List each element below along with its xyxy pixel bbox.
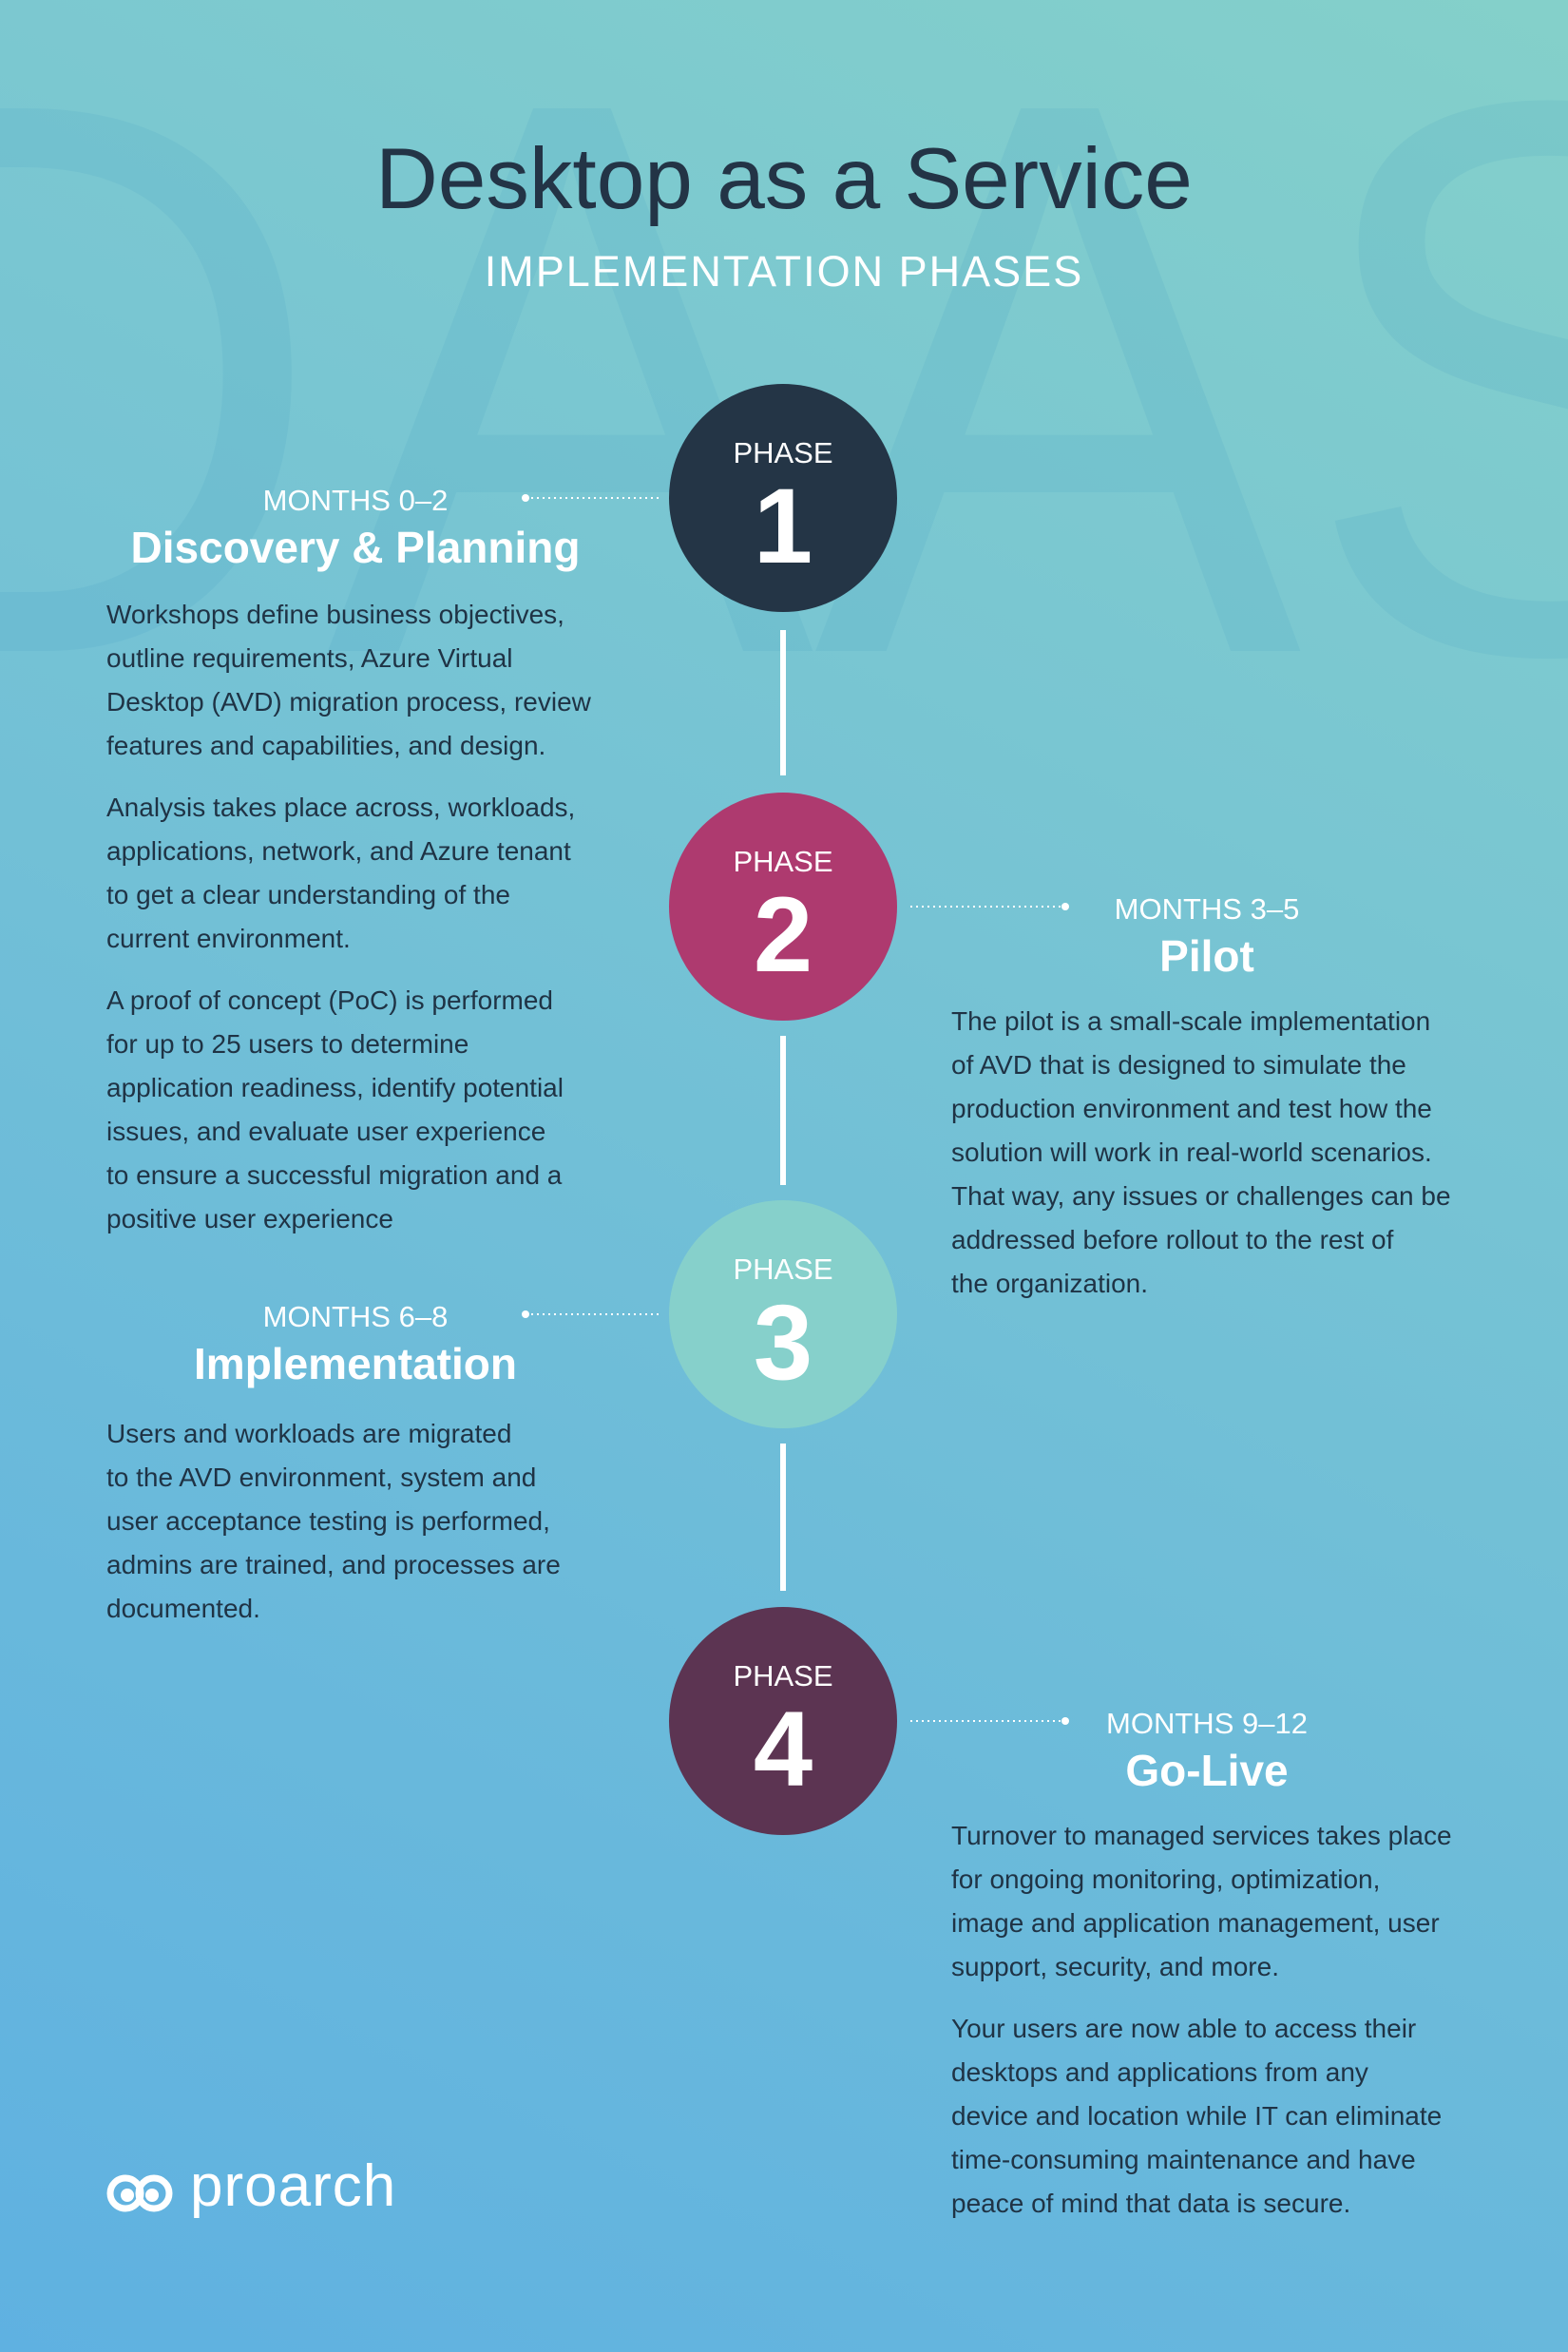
text: features and capabilities, and design. xyxy=(106,731,545,760)
phase 1 circle xyxy=(669,384,897,612)
phase 2 circle: PHASE xyxy=(733,845,833,878)
text: to ensure a successful migration and a xyxy=(106,1160,562,1190)
text: Go-Live xyxy=(1125,1746,1289,1795)
phase 3 text xyxy=(106,1300,561,1623)
text: documented. xyxy=(106,1594,260,1623)
phase 2 circle xyxy=(669,793,897,1021)
text: issues, and evaluate user experience xyxy=(106,1117,545,1146)
phase 2 text xyxy=(951,892,1451,1298)
phase 4 circle: PHASE xyxy=(733,1659,833,1692)
text: Users and workloads are migrated xyxy=(106,1419,511,1448)
text: A proof of concept (PoC) is performed xyxy=(106,985,553,1015)
text: of AVD that is designed to simulate the xyxy=(951,1050,1406,1080)
text: applications, network, and Azure tenant xyxy=(106,836,571,866)
text: Pilot xyxy=(1159,931,1254,981)
text: for up to 25 users to determine xyxy=(106,1029,468,1059)
text: to the AVD environment, system and xyxy=(106,1463,536,1492)
text: Implementation xyxy=(194,1339,517,1388)
text: Desktop (AVD) migration process, review xyxy=(106,687,591,717)
phase 3 circle xyxy=(669,1200,897,1428)
text: device and location while IT can eliminate xyxy=(951,2101,1442,2131)
text: Discovery & Planning xyxy=(131,523,580,572)
text: for ongoing monitoring, optimization, xyxy=(951,1864,1380,1894)
text: MONTHS 9–12 xyxy=(1106,1707,1308,1740)
text: image and application management, user xyxy=(951,1908,1440,1938)
text: MONTHS 0–2 xyxy=(263,484,448,517)
subtitle: IMPLEMENTATION PHASES xyxy=(485,247,1083,296)
text: application readiness, identify potential xyxy=(106,1073,564,1102)
text: The pilot is a small-scale implementation xyxy=(951,1006,1430,1036)
phase 1 circle: 1 xyxy=(754,467,813,585)
text: Analysis takes place across, workloads, xyxy=(106,793,575,822)
phase 2 circle: 2 xyxy=(754,875,813,994)
phase 4 text xyxy=(951,1707,1452,2218)
text: the organization. xyxy=(951,1269,1148,1298)
text: peace of mind that data is secure. xyxy=(951,2189,1350,2218)
text: time-consuming maintenance and have xyxy=(951,2145,1416,2174)
title: Desktop as a Service xyxy=(375,131,1193,227)
text: support, security, and more. xyxy=(951,1952,1279,1981)
text: Turnover to managed services takes place xyxy=(951,1821,1452,1850)
text: current environment. xyxy=(106,924,351,953)
text: addressed before rollout to the rest of xyxy=(951,1225,1393,1254)
text: user acceptance testing is performed, xyxy=(106,1506,550,1536)
text: MONTHS 3–5 xyxy=(1115,892,1299,926)
timeline connector lines xyxy=(780,630,786,1591)
phase 3 circle: 3 xyxy=(754,1283,813,1402)
text: desktops and applications from any xyxy=(951,2057,1368,2087)
text: Your users are now able to access their xyxy=(951,2014,1416,2043)
phase 4 circle xyxy=(669,1607,897,1835)
phase 4 circle: 4 xyxy=(754,1690,813,1808)
phase 1 circle: PHASE xyxy=(733,436,833,469)
text: solution will work in real-world scenarios. xyxy=(951,1138,1432,1167)
text: admins are trained, and processes are xyxy=(106,1550,561,1579)
text: to get a clear understanding of the xyxy=(106,880,510,909)
icon: rings xyxy=(106,2174,173,2212)
text: production environment and test how the xyxy=(951,1094,1432,1123)
phase 1 text xyxy=(106,484,591,1233)
phase 3 circle: PHASE xyxy=(733,1252,833,1286)
logo: proarch: proarch xyxy=(190,2153,396,2219)
text: MONTHS 6–8 xyxy=(263,1300,448,1333)
text: That way, any issues or challenges can be xyxy=(951,1181,1451,1211)
text: outline requirements, Azure Virtual xyxy=(106,643,513,673)
text: Workshops define business objectives, xyxy=(106,600,564,629)
text: positive user experience xyxy=(106,1204,393,1233)
